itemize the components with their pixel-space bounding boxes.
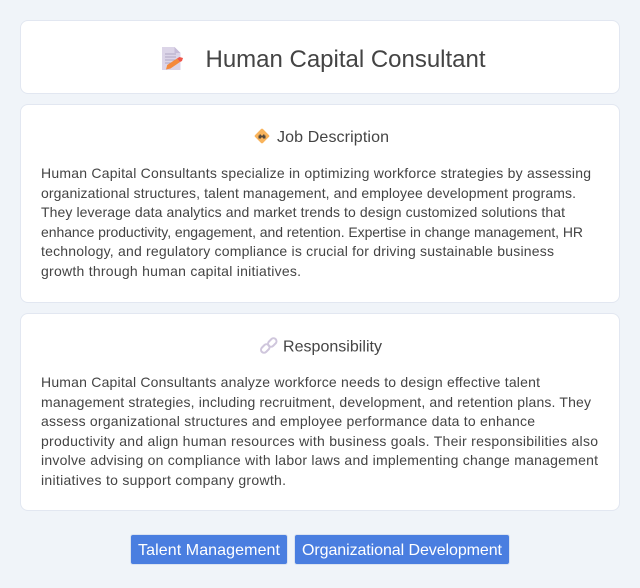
text block: job description: Human Capital Consultants specialize in optimizing workforce strategies by assessing (41, 165, 591, 181)
panel: title card (20, 20, 620, 94)
text block: job description: technology, and regulatory compliance is crucial for driving sustainable business (41, 243, 554, 259)
text block: job description: organizational structures, talent management, and employee development programs. (41, 185, 576, 201)
text block: job description: growth through human capital initiatives. (41, 263, 301, 279)
text block: responsibility: management strategies, including recruitment, development, and retention plans. They (41, 394, 591, 410)
text block: responsibility: involve advising on compliance with labor laws and implementing change management (41, 452, 598, 468)
heading: responsibility: Responsibility (283, 338, 382, 356)
icon: chain link (260, 337, 278, 354)
icon: orange diamond (254, 128, 270, 144)
text block: responsibility: Human Capital Consultants analyze workforce needs to design effective talent (41, 374, 540, 390)
tag: talent management: Talent Management (138, 542, 281, 559)
panel: job description (20, 104, 620, 303)
text block: job description: enhance productivity, engagement, and retention. Expertise in change management, HR (41, 224, 583, 240)
heading: job description: Job Description (277, 129, 389, 146)
tag: talent management (131, 535, 287, 564)
title: Human Capital Consultant (206, 46, 486, 73)
text block: job description (41, 165, 591, 279)
text block: responsibility (41, 374, 598, 488)
panel: responsibility (20, 313, 620, 511)
text block: responsibility: assess organizational structures and employee performance data to enhance (41, 413, 535, 429)
icon: document with pencil (162, 47, 183, 70)
tag: organizational development (295, 535, 509, 564)
text block: responsibility: initiatives to support company growth. (41, 472, 286, 488)
text block: responsibility: productivity and align human resources with business goals. Their responsibilities also (41, 433, 598, 449)
text block: job description: They leverage data analytics and market trends to design customized solutions that (41, 204, 565, 220)
tag: organizational development: Organizational Development (302, 542, 503, 559)
